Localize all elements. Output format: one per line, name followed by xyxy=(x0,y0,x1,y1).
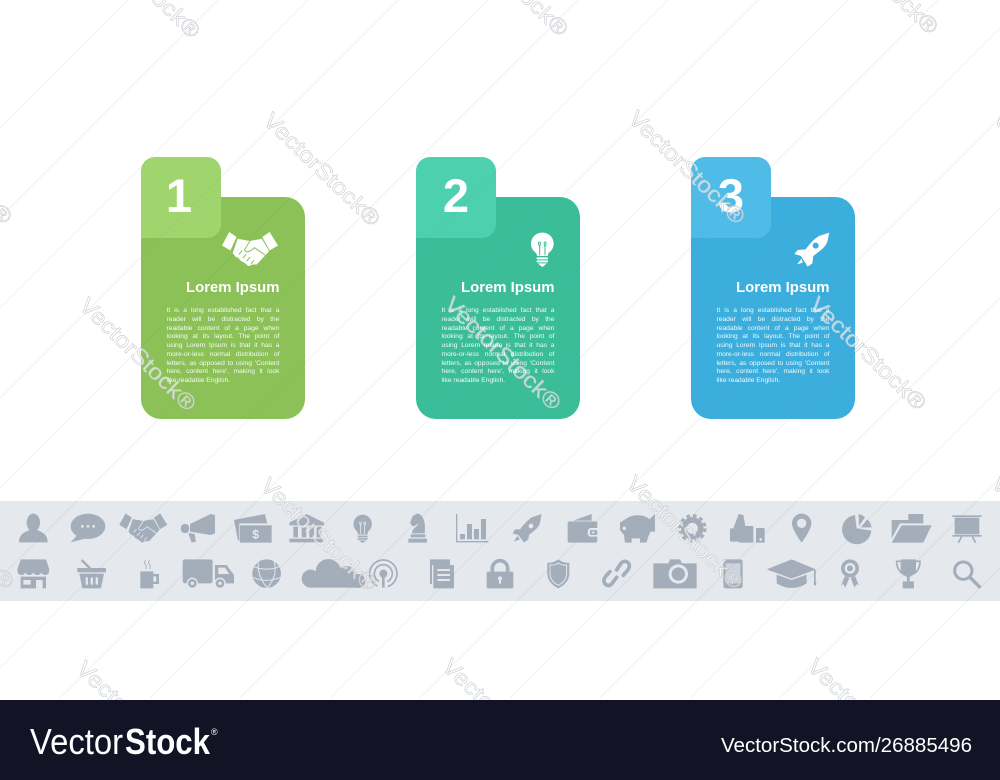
icons: strip left part xyxy=(17,513,365,589)
text block: card 2 body: looking at its layout. The point of xyxy=(442,333,554,340)
text block: card 3 body: here, content here', making it look xyxy=(716,368,830,375)
icon strip background xyxy=(0,501,1000,601)
text block: card 3 body: looking at its layout. The point of xyxy=(716,333,830,340)
footer bar: Stock xyxy=(125,721,211,762)
text block: card 2 body: using Lorem Ipsum is that it has a xyxy=(442,342,554,349)
icons: strip left part: $ xyxy=(252,528,259,542)
text block: card 1 body: here, content here', making it look xyxy=(166,368,280,375)
panel: card 2 teal: Lorem Ipsum xyxy=(461,280,554,296)
text block: card 2 body: here, content here', making it look xyxy=(442,368,554,375)
panel: card 2 teal xyxy=(416,157,580,419)
panel: card 3 blue: 3 xyxy=(718,169,744,222)
text block: card 2 body: more-or-less normal distribution of xyxy=(442,351,554,358)
text block: card 1 body: like readable English. xyxy=(166,377,230,384)
text block: card 1 body: reader will be distracted by the xyxy=(166,316,280,323)
footer bar: VectorStock.com/26885496 xyxy=(721,735,972,757)
text block: card 3 body: reader will be distracted by the xyxy=(716,316,830,323)
watermarks: VectorStock: VectorStock® xyxy=(622,471,748,594)
text block: card 2 body: reader will be distracted by the xyxy=(442,316,554,323)
text block: card 1 body: more-or-less normal distribution of xyxy=(166,351,280,358)
watermarks: VectorStock: VectorStock® xyxy=(75,293,201,416)
text block: card 3 body: It is a long established fact that a xyxy=(716,307,830,314)
text block: card 2 body: It is a long established fact that a xyxy=(442,307,554,314)
footer bar: ® xyxy=(211,727,218,737)
panel: card 2 teal: 2 xyxy=(443,169,469,222)
text block: card 3 body: more-or-less normal distribution of xyxy=(716,351,830,358)
text block: card 1 body: It is a long established fact that a xyxy=(166,307,280,314)
watermarks: VectorStock: VectorStock® xyxy=(438,654,564,777)
text block: card 2 body: like readable English. xyxy=(442,377,505,384)
text block: card 3 body: readable content of a page when xyxy=(716,324,830,332)
icons: strip middle part xyxy=(353,513,655,592)
text block: card 3 body: like readable English. xyxy=(716,377,780,384)
panel: card 1 green: 1 xyxy=(166,169,192,222)
footer bar: Vector xyxy=(30,721,123,762)
watermarks: VectorStock: VectorStock® xyxy=(803,654,929,777)
text block: card 1 body: using Lorem Ipsum is that it has a xyxy=(166,342,280,349)
watermarks: VectorStock: VectorStock® xyxy=(440,292,566,415)
text block: card 3 body: using Lorem Ipsum is that it has a xyxy=(716,342,830,349)
watermarks: VectorStock: VectorStock® xyxy=(624,106,750,229)
text block: card 1 body xyxy=(166,307,280,384)
watermarks: VectorStock: VectorStock® xyxy=(805,292,931,415)
watermarks: VectorStock: VectorStock® xyxy=(72,656,198,779)
text block: card 2 body xyxy=(442,307,554,384)
panel: card 3 blue: Lorem Ipsum xyxy=(736,280,830,296)
watermarks: VectorStock: VectorStock® xyxy=(259,108,385,231)
watermarks: VectorStock: VectorStock® xyxy=(256,473,382,596)
text block: card 3 body: letters, as opposed to using 'Content xyxy=(716,360,830,366)
footer bar xyxy=(0,700,1000,780)
text block: card 1 body: looking at its layout. The point of xyxy=(166,333,280,340)
panel: card 3 blue xyxy=(691,157,855,419)
text block: card 3 body xyxy=(716,307,830,384)
text block: card 2 body: readable content of a page when xyxy=(442,324,554,332)
text block: card 1 body: readable content of a page when xyxy=(166,324,280,332)
text block: card 2 body: letters, as opposed to using 'Content xyxy=(442,360,554,366)
panel: card 1 green: Lorem Ipsum xyxy=(186,280,280,296)
panel: card 1 green xyxy=(141,157,305,419)
icons: strip right part xyxy=(653,514,982,588)
text block: card 1 body: letters, as opposed to using 'Content xyxy=(166,360,280,366)
